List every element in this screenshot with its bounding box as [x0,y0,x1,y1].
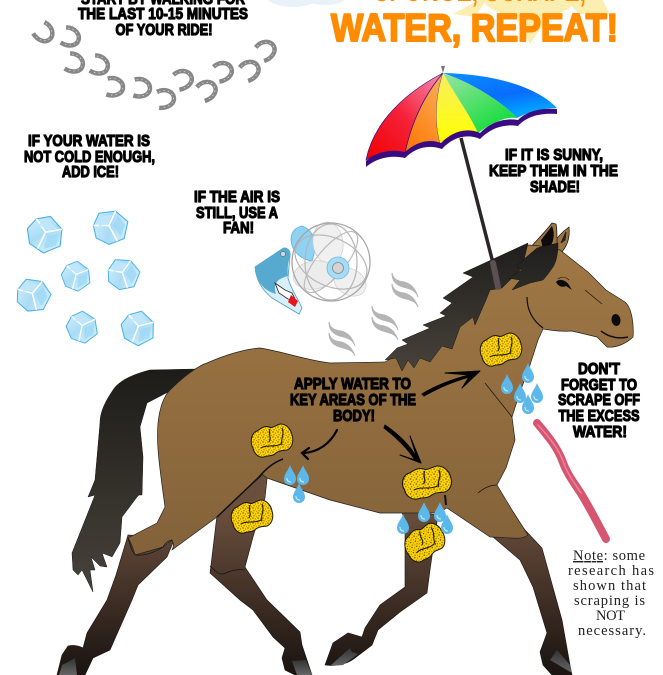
pole grip over neck [493,263,498,287]
text: use a fan [194,189,280,237]
umbrella rim [366,109,557,167]
cloud [265,0,347,7]
text: start by walking: OF YOUR RIDE! [116,22,212,39]
far front leg [325,510,438,665]
note [568,548,654,639]
text: apply water: BODY! [333,408,375,425]
near front leg [447,500,572,675]
text: apply water [290,376,416,425]
tail [72,369,197,592]
arrow: to elbow [384,425,421,463]
ice cubes [11,202,159,349]
horseshoe trail [33,21,278,108]
sponges [231,333,522,565]
arrow: to flank [302,430,337,459]
text: add ice: ADD ICE! [62,164,119,181]
text: scrape water: THE EXCESS [558,408,640,425]
far hind leg [210,470,312,675]
text: add ice [24,133,155,181]
umbrella pole [461,138,493,263]
note: Note: some [573,548,645,564]
text: add ice: IF YOUR WATER IS [28,133,150,150]
text: add ice: NOT COLD ENOUGH, [24,149,155,166]
note: shown that [573,578,646,594]
text: start by walking [78,0,248,39]
ears [552,227,569,254]
heat waves [329,273,418,356]
text: scrape water [558,361,640,441]
note: necessary. [578,623,646,639]
near hind leg [57,535,175,675]
text: use a fan: STILL, USE A [196,205,278,222]
text: apply water: APPLY WATER TO [294,376,411,393]
forelock [508,243,558,290]
body and head [128,245,633,555]
water drops [284,363,543,534]
arrow: to chest [422,371,480,396]
text: keep in shade [489,147,618,196]
mane [385,243,528,371]
scraper [537,423,606,539]
text: scrape water: DON'T [578,361,620,378]
sun behind title [453,0,610,44]
nostril [611,313,621,327]
text: keep in shade: KEEP THEM IN THE [489,163,618,180]
text: start by walking: THE LAST 10-15 MINUTES [78,6,248,23]
text: apply water: KEY AREAS OF THE [290,392,416,409]
icon: fan [255,220,376,314]
text: use a fan: FAN! [223,220,254,237]
text: use a fan: IF THE AIR IS [194,189,280,206]
horse [57,223,633,675]
text: scrape water: WATER! [573,424,627,441]
note: NOT [596,608,625,624]
text: scrape water: FORGET TO [561,377,637,394]
text: scrape water: SCRAPE OFF [558,392,640,409]
canopy panels [366,73,557,160]
eye [556,280,572,290]
umbrella [366,66,557,263]
facial details [128,277,628,574]
hooves [59,648,572,675]
text: keep in shade: IF IT IS SUNNY, [505,147,603,164]
note: scraping is [574,593,645,609]
note: research has [568,563,654,579]
text: keep in shade: SHADE! [530,179,580,196]
title: WATER, REPEAT! [331,7,618,50]
